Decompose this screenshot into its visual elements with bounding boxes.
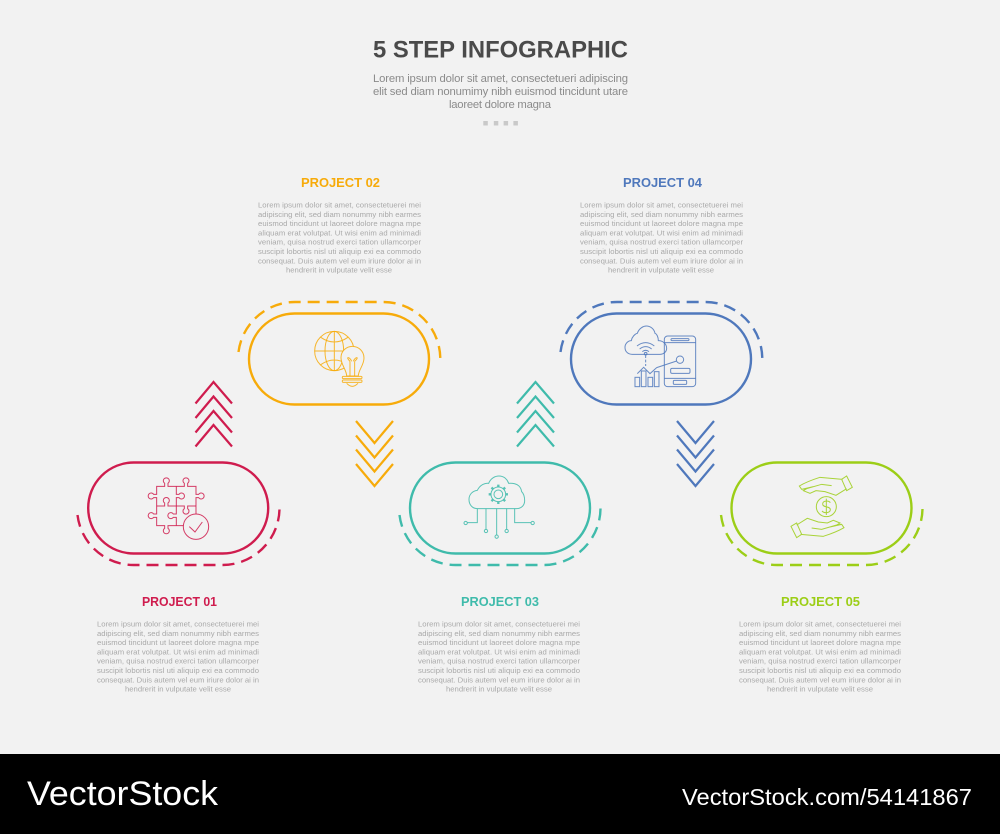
body text 01: Lorem ipsum dolor sit amet, consectetuerei mei bbox=[97, 620, 259, 628]
body text 04: suscipit lobortis nisl uti aliquip exi ea commodo bbox=[580, 247, 743, 256]
body text 04 bbox=[580, 200, 743, 275]
body text 01 bbox=[97, 620, 259, 694]
subtitle text block: Lorem ipsum dolor sit amet, consectetueri adipiscing bbox=[373, 73, 628, 85]
pill outline 04 bbox=[571, 314, 751, 404]
body text 03: hendrerit in vulputate velit esse bbox=[446, 685, 552, 694]
arrow: blue chevrons down bbox=[677, 421, 714, 486]
body text 05: veniam, quisa nostrud exerci tation ullamcorper bbox=[739, 657, 901, 666]
body text 02: aliquam erat volutpat. Ut wisi enim ad minimadi bbox=[258, 228, 421, 237]
body text 03: consequat. Duis autem vel eum iriure dolor ai in bbox=[418, 675, 580, 684]
heading 04: PROJECT 04 bbox=[623, 176, 702, 190]
body text 03: suscipit lobortis nisl uti aliquip exi ea commodo bbox=[418, 666, 580, 675]
pill outline 05 bbox=[732, 462, 912, 554]
panel: project 04 bbox=[560, 176, 762, 404]
subtitle text block bbox=[373, 73, 628, 111]
panel: project 01 bbox=[78, 462, 280, 694]
body text 05: euismod tincidunt ut laoreet dolore magna mpe bbox=[739, 638, 901, 647]
body text 04: veniam, quisa nostrud exerci tation ullamcorper bbox=[580, 238, 743, 247]
body text 01: suscipit lobortis nisl uti aliquip exi ea commodo bbox=[97, 666, 259, 675]
body text 05: suscipit lobortis nisl uti aliquip exi ea commodo bbox=[739, 666, 901, 675]
body text 03: Lorem ipsum dolor sit amet, consectetuerei mei bbox=[418, 620, 580, 628]
heading 02: PROJECT 02 bbox=[301, 176, 380, 190]
dashed arc 03 bbox=[400, 507, 601, 565]
dashed arc 01 bbox=[78, 507, 280, 565]
heading 05: PROJECT 05 bbox=[781, 595, 860, 609]
heading 01: PROJECT 01 bbox=[142, 595, 217, 609]
body text 02: suscipit lobortis nisl uti aliquip exi ea commodo bbox=[258, 247, 421, 256]
body text 03: adipiscing elit, sed diam nonummy nibh earmes bbox=[418, 629, 580, 638]
footer brand: VectorStock bbox=[27, 775, 219, 813]
icon: puzzle with check bbox=[148, 478, 209, 539]
body text 05: adipiscing elit, sed diam nonummy nibh earmes bbox=[739, 629, 901, 638]
body text 05: aliquam erat volutpat. Ut wisi enim ad minimadi bbox=[739, 647, 901, 656]
heading 03: PROJECT 03 bbox=[461, 595, 539, 609]
body text 02: Lorem ipsum dolor sit amet, consectetuerei mei bbox=[258, 200, 421, 210]
icon: cloud, phone and chart bbox=[625, 326, 696, 387]
icon: hands with dollar coin bbox=[791, 476, 852, 538]
subtitle text block: laoreet dolore magna bbox=[449, 99, 552, 111]
body text 04: euismod tincidunt ut laoreet dolore magna mpe bbox=[580, 219, 743, 228]
body text 04: consequat. Duis autem vel eum iriure dolor ai in bbox=[580, 256, 743, 265]
body text 02 bbox=[258, 200, 421, 275]
body text 01: consequat. Duis autem vel eum iriure dolor ai in bbox=[97, 675, 259, 684]
body text 03: veniam, quisa nostrud exerci tation ullamcorper bbox=[418, 657, 580, 666]
body text 01: hendrerit in vulputate velit esse bbox=[125, 685, 231, 694]
body text 05: consequat. Duis autem vel eum iriure dolor ai in bbox=[739, 675, 901, 684]
body text 05 bbox=[739, 620, 901, 694]
arrow: red chevrons up bbox=[196, 382, 232, 446]
title: 5 STEP INFOGRAPHIC bbox=[373, 36, 628, 64]
body text 02: adipiscing elit, sed diam nonummy nibh earmes bbox=[258, 210, 421, 219]
body text 01: veniam, quisa nostrud exerci tation ullamcorper bbox=[97, 657, 259, 666]
pill outline 01 bbox=[88, 462, 268, 554]
footer watermark bar bbox=[0, 754, 1000, 834]
subtitle text block: elit sed diam nonumimy nibh euismod tincidunt utare bbox=[373, 86, 628, 98]
dashed arc 04 bbox=[560, 302, 762, 360]
icon: globe and light bulb bbox=[315, 331, 364, 386]
body text 04: hendrerit in vulputate velit esse bbox=[608, 266, 714, 275]
body text 05: hendrerit in vulputate velit esse bbox=[767, 685, 873, 694]
pill outline 02 bbox=[249, 314, 429, 404]
panel: project 02 bbox=[238, 176, 440, 404]
arrow: teal chevrons up bbox=[517, 382, 554, 446]
body text 04: aliquam erat volutpat. Ut wisi enim ad minimadi bbox=[580, 228, 743, 237]
body text 01: euismod tincidunt ut laoreet dolore magna mpe bbox=[97, 638, 259, 647]
arrow: orange chevrons down bbox=[356, 421, 393, 486]
dashed arc 02 bbox=[238, 302, 440, 360]
icon: cloud with gear and circuits bbox=[464, 476, 534, 538]
body text 03: euismod tincidunt ut laoreet dolore magna mpe bbox=[418, 638, 580, 647]
body text 04: adipiscing elit, sed diam nonummy nibh earmes bbox=[580, 210, 743, 219]
title separator dots bbox=[483, 121, 518, 126]
body text 02: hendrerit in vulputate velit esse bbox=[286, 266, 392, 275]
panel: project 05 bbox=[721, 462, 923, 694]
body text 02: veniam, quisa nostrud exerci tation ullamcorper bbox=[258, 238, 421, 247]
dashed arc 05 bbox=[721, 507, 923, 565]
panel: project 03 bbox=[400, 462, 601, 694]
body text 01: adipiscing elit, sed diam nonummy nibh earmes bbox=[97, 629, 259, 638]
body text 02: euismod tincidunt ut laoreet dolore magna mpe bbox=[258, 219, 421, 228]
body text 02: consequat. Duis autem vel eum iriure dolor ai in bbox=[258, 256, 421, 265]
body text 04: Lorem ipsum dolor sit amet, consectetuerei mei bbox=[580, 200, 743, 210]
body text 05: Lorem ipsum dolor sit amet, consectetuerei mei bbox=[739, 620, 901, 628]
body text 03: aliquam erat volutpat. Ut wisi enim ad minimadi bbox=[418, 647, 580, 656]
pill outline 03 bbox=[410, 462, 590, 554]
body text 01: aliquam erat volutpat. Ut wisi enim ad minimadi bbox=[97, 647, 259, 656]
body text 03 bbox=[418, 620, 580, 694]
footer image id: VectorStock.com/54141867 bbox=[682, 784, 972, 810]
